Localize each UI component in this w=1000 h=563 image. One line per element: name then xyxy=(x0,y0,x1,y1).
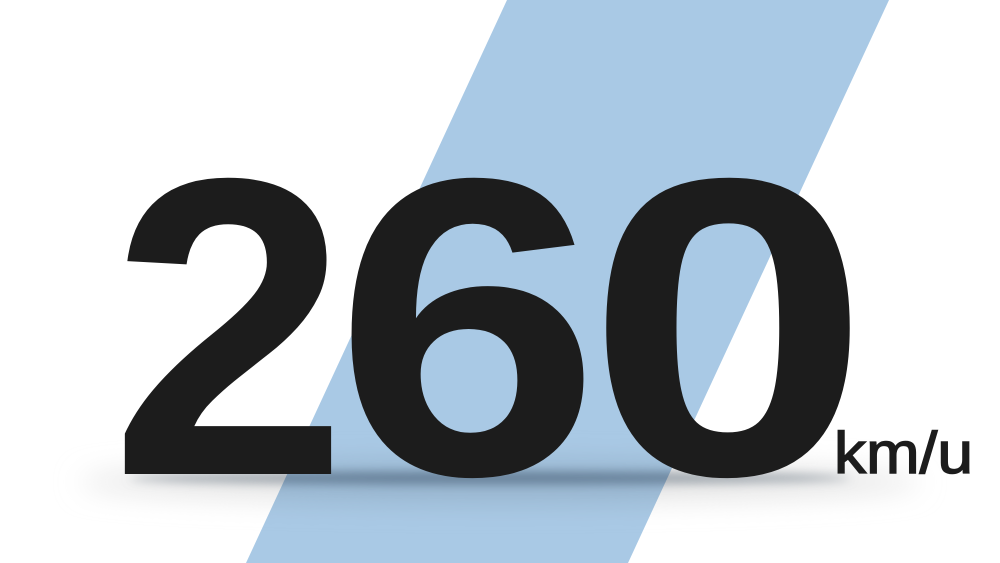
digit 6: 6 xyxy=(334,90,601,563)
diagonal blue band xyxy=(246,0,889,563)
ground shadow xyxy=(80,464,920,500)
headline number 260 xyxy=(110,90,871,563)
digit 2: 2 xyxy=(110,91,348,563)
unit label km/u: km/u xyxy=(834,421,973,486)
digit 0: 0 xyxy=(586,90,871,563)
